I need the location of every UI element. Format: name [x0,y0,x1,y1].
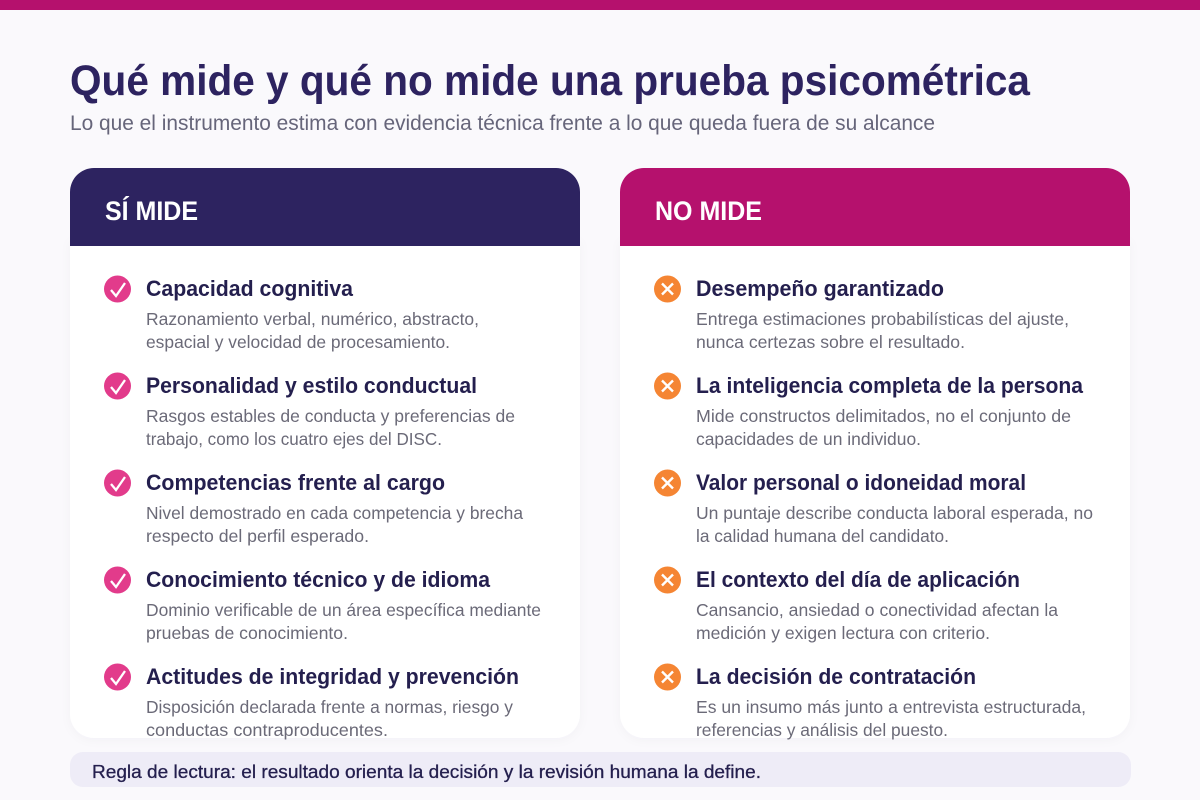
item: desempeño: Desempeño garantizado [696,276,944,301]
item: decisión [654,664,1086,740]
item: valor personal [654,470,1093,546]
icon: cross [654,276,681,302]
item: desempeño [654,276,1069,352]
icon: cross [654,470,681,496]
item: personalidad: Personalidad y estilo conductual [146,373,477,398]
panel: sí mide [70,168,580,740]
icon: cross [654,664,681,690]
title: Qué mide y qué no mide una prueba psicométrica [70,57,1031,105]
item: decisión: La decisión de contratación [696,664,976,689]
item: contexto: Cansancio, ansiedad o conectividad afectan la [696,600,1058,620]
item: actitudes: Actitudes de integridad y prevención [146,664,519,689]
item: valor personal: Valor personal o idoneidad moral [696,470,1026,495]
icon: check [104,566,131,594]
item: conocimiento: Dominio verificable de un área específica mediante [146,600,541,620]
panel background [620,240,1130,738]
item: valor personal: la calidad humana del candidato. [696,526,949,546]
item: inteligencia: Mide constructos delimitados, no el conjunto de [696,406,1071,426]
subtitle: Lo que el instrumento estima con evidencia técnica frente a lo que queda fuera de su alcance [70,112,935,135]
item: capacidad cognitiva: Razonamiento verbal, numérico, abstracto, [146,309,479,329]
panel header [620,168,1130,246]
item: inteligencia: capacidades de un individuo. [696,429,921,449]
icon: check [104,276,131,302]
item: conocimiento: Conocimiento técnico y de idioma [146,567,491,592]
item: competencias: Competencias frente al cargo [146,470,445,495]
item: competencias: respecto del perfil esperado. [146,526,369,546]
item: capacidad cognitiva [104,276,479,352]
item: capacidad cognitiva: espacial y velocidad de procesamiento. [146,332,450,352]
callout: reading rule [70,752,1131,787]
item: personalidad: trabajo, como los cuatro ejes del DISC. [146,429,442,449]
item: decisión: Es un insumo más junto a entrevista estructurada, [696,697,1086,717]
item: conocimiento: pruebas de conocimiento. [146,623,348,643]
item: personalidad: Rasgos estables de conducta y preferencias de [146,406,515,426]
item: actitudes: conductas contraproducentes. [146,720,388,740]
item: inteligencia [654,372,1084,449]
icon: check [104,372,131,400]
item: capacidad cognitiva: Capacidad cognitiva [146,276,354,301]
item: competencias: Nivel demostrado en cada competencia y brecha [146,503,523,523]
item: conocimiento [104,566,541,643]
icon: check [104,470,131,496]
panel header [70,168,580,246]
item: desempeño: nunca certezas sobre el resultado. [696,332,965,352]
icon: cross [654,566,681,594]
callout: reading rule: Regla de lectura: el resultado orienta la decisión y la revisión humana la define. [92,762,761,782]
item: contexto: medición y exigen lectura con criterio. [696,623,990,643]
item: valor personal: Un puntaje describe conducta laboral esperada, no [696,503,1093,523]
item: inteligencia: La inteligencia completa de la persona [696,373,1084,398]
top accent bar [0,0,1200,10]
panel heading: NO MIDE [655,196,762,226]
panel background [70,240,580,738]
item: personalidad [104,372,515,449]
icon: cross [654,372,681,400]
item: competencias [104,470,523,546]
item: contexto: El contexto del día de aplicación [696,567,1020,592]
panel heading: SÍ MIDE [105,195,198,226]
item: actitudes [104,664,519,740]
panel: no mide [620,168,1130,740]
item: desempeño: Entrega estimaciones probabilísticas del ajuste, [696,309,1069,329]
item: decisión: referencias y análisis del puesto. [696,720,948,740]
item: actitudes: Disposición declarada frente a normas, riesgo y [146,697,513,717]
icon: check [104,664,131,690]
item: contexto [654,566,1058,643]
